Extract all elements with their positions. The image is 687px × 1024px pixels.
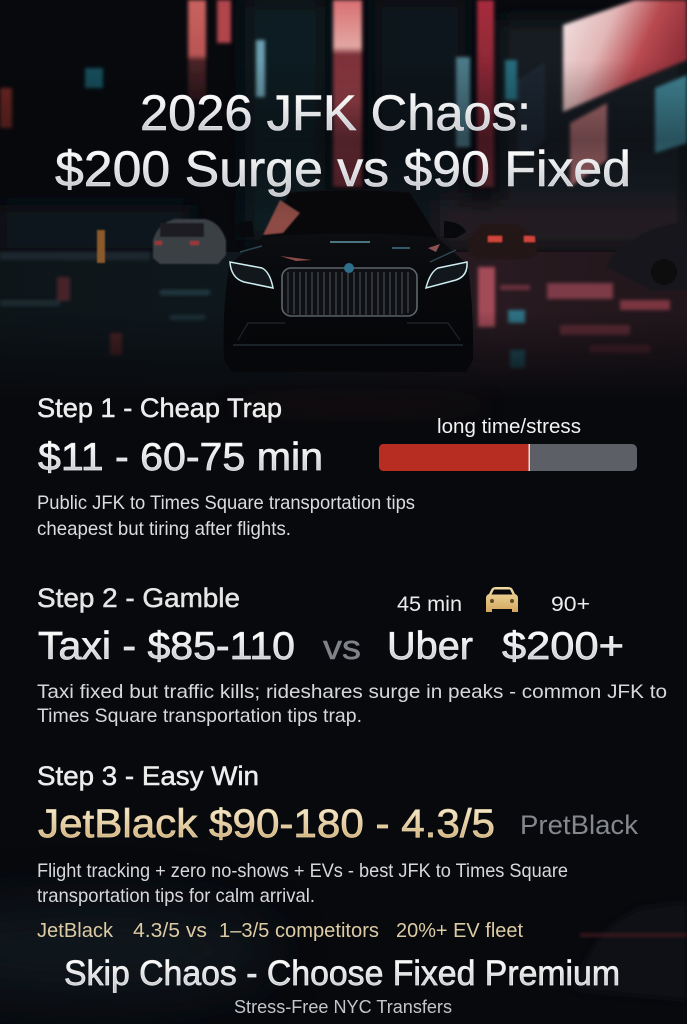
comparison stats: 4.3/5 vs	[133, 920, 207, 942]
comparison stats: 1–3/5 competitors	[219, 920, 379, 942]
title backdrop shade	[0, 68, 687, 208]
step 1 description	[37, 492, 415, 540]
step 3 panel	[37, 761, 639, 942]
step 1 description: Public JFK to Times Square transportation tips	[37, 492, 415, 514]
comparison stats: 20%+ EV fleet	[396, 920, 523, 942]
vs label: vs	[323, 629, 361, 667]
step 3 heading: Step 3 - Easy Win	[37, 761, 259, 791]
title: 2026 JFK Chaos:	[140, 85, 531, 141]
step 1 price: $11 - 60-75 min	[38, 436, 323, 479]
background car far right	[607, 222, 687, 290]
bottom ghost car and street glow	[0, 395, 687, 1000]
grille	[282, 268, 417, 316]
lower bumper	[238, 323, 460, 340]
windshield	[284, 190, 424, 217]
jetblack price: JetBlack $90-180 - 4.3/5	[38, 802, 495, 846]
pretblack label: PretBlack	[520, 810, 639, 840]
background scene: rainy city street	[0, 0, 687, 400]
step 1 panel	[37, 393, 637, 540]
step 2 description: Times Square transportation tips trap.	[37, 705, 362, 727]
time label 90+: 90+	[551, 593, 590, 616]
bar label: long time/stress	[437, 416, 581, 438]
footer tagline: Stress-Free NYC Transfers	[234, 996, 452, 1017]
background car left	[153, 219, 226, 264]
uber price: $200+	[502, 625, 624, 668]
badge	[344, 263, 354, 273]
call to action: Skip Chaos - Choose Fixed Premium	[64, 954, 620, 993]
scene fade to black	[0, 310, 687, 400]
step 2 description: Taxi fixed but traffic kills; rideshares surge in peaks - common JFK to	[37, 681, 667, 703]
left headlight	[230, 262, 273, 288]
luxury black car	[224, 189, 473, 372]
right headlight	[426, 262, 467, 288]
step 3 description: transportation tips for calm arrival.	[37, 885, 315, 907]
comparison stats: JetBlack	[37, 920, 114, 942]
uber label: Uber	[387, 625, 473, 668]
left street post	[97, 230, 105, 263]
comparison stats	[37, 920, 523, 942]
step 2 description	[37, 681, 667, 727]
stress bar	[379, 444, 637, 471]
title: $200 Surge vs $90 Fixed	[55, 141, 631, 197]
icon: car	[486, 587, 518, 612]
step 3 description	[37, 860, 568, 907]
taxi price: Taxi - $85-110	[38, 625, 295, 668]
hood highlights	[280, 256, 312, 261]
side mirrors	[242, 221, 254, 237]
step 3 description: Flight tracking + zero no-shows + EVs - best JFK to Times Square	[37, 860, 568, 882]
step 2 panel	[37, 583, 667, 727]
step 2 heading: Step 2 - Gamble	[37, 583, 240, 613]
title	[55, 85, 631, 197]
step 1 heading: Step 1 - Cheap Trap	[37, 393, 282, 423]
background car red	[468, 224, 537, 259]
step 1 description: cheapest but tiring after flights.	[37, 518, 291, 540]
street surface	[0, 251, 687, 378]
time label 45 min: 45 min	[397, 593, 462, 616]
